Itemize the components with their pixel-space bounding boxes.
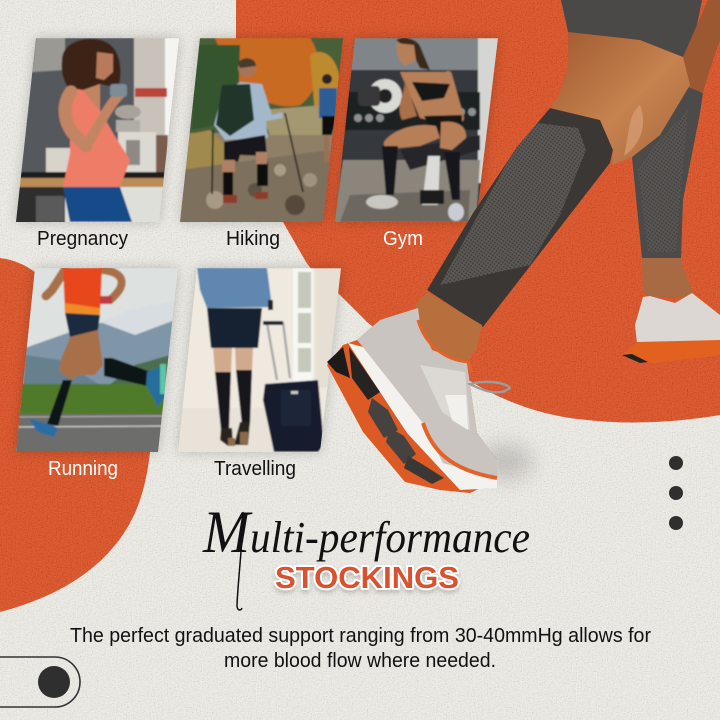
ankle: [415, 292, 482, 362]
photo: running: [16, 268, 178, 452]
photo: gym: [330, 38, 500, 228]
title: stockings: STOCKINGS: [275, 560, 459, 595]
label: running: Running: [48, 458, 118, 480]
description: [70, 625, 651, 672]
toggle icon: [0, 657, 80, 707]
rear leg: [622, 0, 720, 363]
title: script line: [202, 499, 530, 610]
photo shadows: [16, 38, 498, 452]
compression shorts: [561, 0, 702, 57]
label: hiking: Hiking: [226, 228, 280, 250]
orange shape: top right: [236, 0, 720, 422]
athlete legs: [327, 0, 720, 493]
decorative dots: [669, 456, 683, 530]
photo: pregnancy: [10, 38, 185, 228]
front calf sleeve: [427, 108, 613, 327]
label: gym: Gym: [383, 228, 423, 250]
label: pregnancy: Pregnancy: [37, 228, 128, 250]
description: more blood flow where needed.: [224, 650, 496, 672]
front shoe: [327, 308, 510, 493]
title: script line: Multi-performance: [202, 499, 530, 565]
photo: hiking: [175, 38, 350, 228]
label: travelling: Travelling: [214, 458, 296, 480]
description: The perfect graduated support ranging from 30-40mmHg allows for: [70, 625, 651, 647]
thigh and knee: [550, 32, 690, 165]
orange shape: bottom left: [0, 258, 150, 612]
photo: travelling: [175, 268, 345, 458]
shoe shadow: [477, 444, 533, 480]
